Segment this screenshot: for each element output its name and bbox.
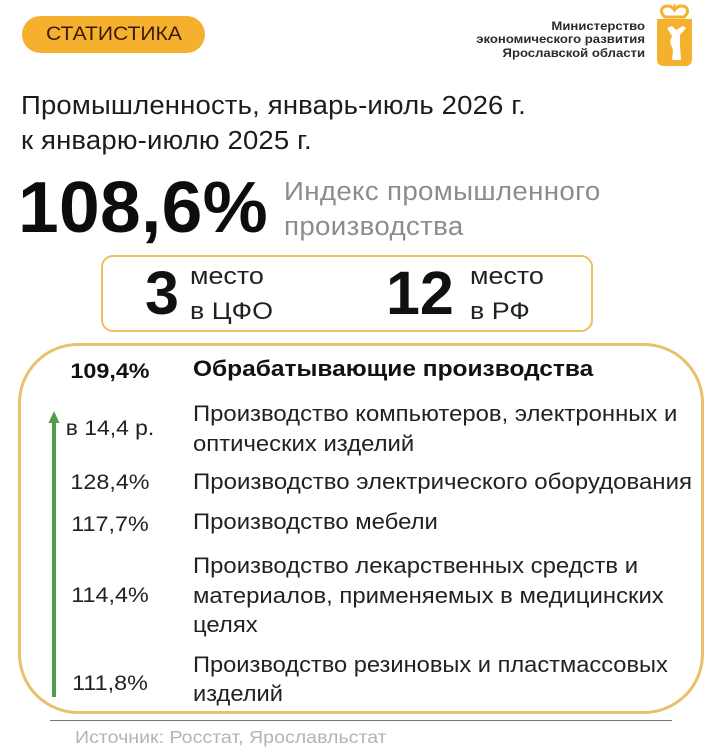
- row 1 value: 109,4%: [70, 359, 150, 383]
- arrow: growth: [48, 411, 60, 697]
- ministry name: Ярославской области: [503, 48, 645, 60]
- panel: branches: [18, 342, 704, 714]
- rank: цфо label: место: [190, 263, 264, 290]
- row 2 label: оптических изделий: [193, 430, 414, 456]
- source line: [50, 720, 672, 721]
- main value label: [284, 178, 601, 241]
- row 5 label: материалов, применяемых в медицинских: [193, 582, 664, 608]
- row 2 value: в 14,4 р.: [66, 416, 154, 440]
- source text: Источник: Росстат, Ярославльстат: [75, 727, 387, 747]
- ministry name: [476, 20, 645, 60]
- row 3 label: Производство электрического оборудования: [193, 469, 692, 494]
- row 2 label: [193, 401, 677, 456]
- row 2 label: Производство компьютеров, электронных и: [193, 401, 677, 426]
- main value: 108,6%: [18, 168, 268, 248]
- rank: цфо label: в ЦФО: [190, 298, 273, 325]
- badge: статистика: СТАТИСТИКА: [46, 23, 181, 45]
- rank: рф label: в РФ: [470, 298, 530, 325]
- rank: рф label: [470, 263, 544, 325]
- row 6 label: Производство резиновых и пластмассовых: [193, 652, 668, 677]
- row 6 label: изделий: [193, 681, 283, 706]
- main value label: производства: [284, 213, 464, 241]
- rank: цфо label: [190, 263, 273, 325]
- main value label: Индекс промышленного: [284, 178, 601, 206]
- title: к январю-июлю 2025 г.: [21, 127, 312, 155]
- icon: coat of arms: [657, 4, 692, 66]
- row 1 label: Обрабатывающие производства: [193, 356, 593, 381]
- panel: rank: [101, 255, 593, 332]
- ministry name: Министерство: [551, 20, 645, 32]
- title: Промышленность, январь-июль 2026 г.: [21, 92, 526, 120]
- rank: рф number: 12: [386, 259, 454, 327]
- row 5 label: целях: [193, 612, 258, 637]
- badge: статистика: [22, 16, 205, 53]
- row 5 label: Производство лекарственных средств и: [193, 553, 638, 578]
- row 4 value: 117,7%: [71, 512, 149, 536]
- row 5 label: [193, 553, 664, 637]
- rank: цфо number: 3: [145, 259, 179, 327]
- row 4 label: Производство мебели: [193, 509, 438, 534]
- rank: рф label: место: [470, 263, 544, 290]
- row 3 value: 128,4%: [70, 470, 150, 494]
- row 5 value: 114,4%: [71, 583, 149, 607]
- row 6 label: [193, 652, 668, 706]
- row 6 value: 111,8%: [72, 671, 148, 695]
- ministry name: экономического развития: [476, 34, 645, 46]
- title: [21, 92, 526, 155]
